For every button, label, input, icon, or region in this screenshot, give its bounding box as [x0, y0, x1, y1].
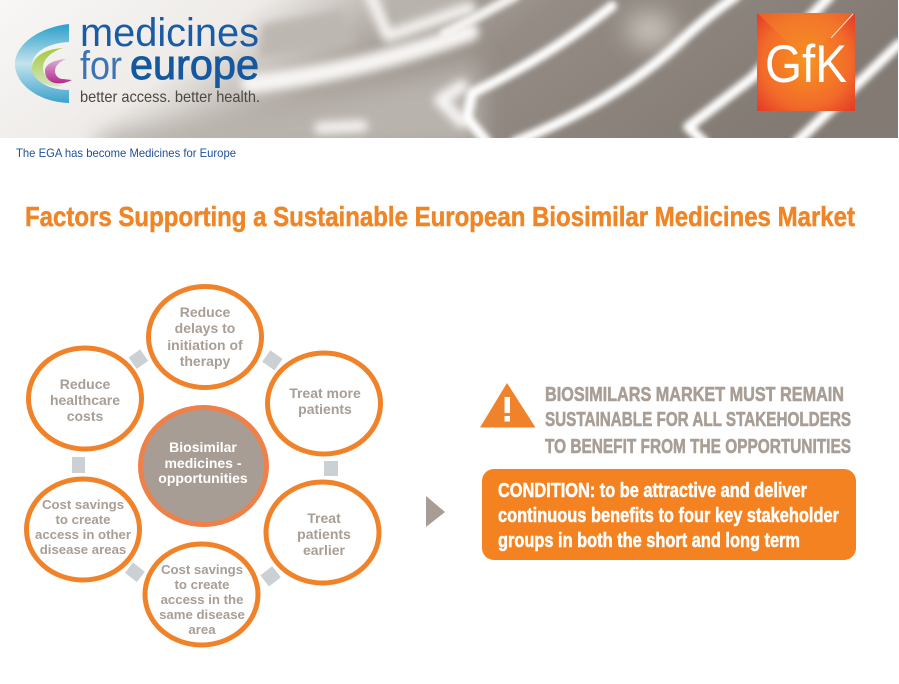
circle: cost savings other disease areas [26, 479, 140, 580]
circle: cost savings same disease area: to create [175, 577, 229, 592]
rebrand note: The EGA has become Medicines for Europe [16, 146, 236, 160]
GfK logo: GfK [765, 35, 847, 94]
circle: treat more patients: patients [298, 401, 352, 417]
circle: cost savings other disease areas: disease areas [40, 542, 126, 557]
circle: cost savings same disease area: same disease [159, 607, 245, 622]
logo wordmark: medicines [80, 11, 259, 55]
sustainability statement [545, 383, 851, 458]
central circle: biosimilar medicines opportunities: Biosimilar [169, 439, 237, 455]
condition callout [482, 469, 856, 560]
circle: cost savings other disease areas: to create [56, 512, 110, 527]
circle: treat more patients: Treat more [289, 385, 361, 401]
logo tagline: better access. better health. [80, 89, 260, 106]
connectors between opportunity circles [72, 349, 338, 586]
circle: treat more patients [268, 353, 380, 454]
logo: medicines for europe [15, 11, 260, 106]
arrow [426, 496, 445, 527]
circle: cost savings same disease area [145, 544, 258, 645]
circle: reduce delays to initiation of therapy [148, 286, 262, 388]
circle: reduce delays to initiation of therapy: Reduce [180, 304, 230, 320]
GfK logo [757, 13, 855, 111]
logo mark [15, 24, 72, 103]
circle: cost savings other disease areas: access in other [35, 527, 131, 542]
condition callout: groups in both the short and long term [498, 530, 800, 552]
circle: cost savings same disease area: area [188, 622, 216, 637]
icon: warning triangle [480, 383, 536, 428]
circle: reduce delays to initiation of therapy: initiation of [167, 337, 243, 353]
circle: treat patients earlier: earlier [303, 542, 346, 558]
logo wordmark second line: for [80, 44, 122, 88]
condition callout: CONDITION: to be attractive and deliver [498, 480, 807, 502]
circle: reduce delays to initiation of therapy: delays to [175, 320, 235, 336]
circle: reduce healthcare costs: costs [67, 408, 103, 424]
central circle: biosimilar medicines opportunities: medicines - [164, 455, 242, 471]
circle: reduce healthcare costs: healthcare [50, 392, 120, 408]
circle: treat patients earlier [266, 482, 379, 583]
circle: treat patients earlier: Treat [307, 510, 341, 526]
circle: treat patients earlier: patients [297, 526, 351, 542]
central circle: biosimilar medicines opportunities [140, 408, 266, 524]
circle: reduce healthcare costs [28, 348, 142, 449]
circle: reduce healthcare costs: Reduce [60, 376, 110, 392]
header banner photo [0, 0, 898, 138]
circle: cost savings other disease areas: Cost savings [42, 497, 124, 512]
circle: cost savings same disease area: access in the [161, 592, 243, 607]
circle: reduce delays to initiation of therapy: therapy [180, 353, 230, 369]
logo wordmark second line: europe [130, 41, 259, 88]
central circle: biosimilar medicines opportunities: opportunities [158, 470, 248, 486]
circle: cost savings same disease area: Cost savings [161, 562, 243, 577]
